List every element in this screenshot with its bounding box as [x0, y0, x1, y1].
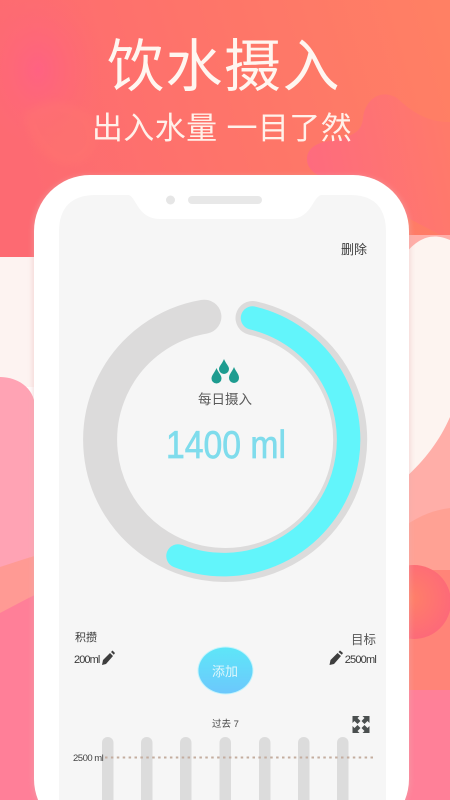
goal value	[330, 650, 376, 666]
goal label: 目标	[351, 633, 376, 647]
subtitle: 出入水量 一目了然	[92, 111, 352, 146]
phone frame	[32, 175, 411, 800]
add button	[198, 646, 254, 694]
goal value: 2500ml	[345, 654, 376, 666]
icon: pencil	[330, 650, 343, 665]
savings value	[74, 650, 115, 666]
target label: 2500 ml	[73, 753, 104, 764]
background: coral header	[0, 0, 450, 300]
icon: pencil	[102, 650, 115, 665]
chart heading: 过去 7	[212, 718, 239, 730]
title: 饮水摄入	[107, 35, 341, 99]
target line	[105, 756, 375, 758]
delete button: 删除	[341, 242, 367, 257]
phone speaker	[188, 196, 262, 204]
phone camera	[166, 196, 175, 204]
ring progress	[178, 318, 349, 565]
background: right waves	[377, 235, 450, 800]
bars	[102, 737, 348, 800]
water drops icon	[212, 359, 239, 384]
savings label: 积攒	[75, 630, 97, 644]
bar chart	[73, 737, 375, 800]
ring track	[100, 317, 350, 565]
background: left waves	[0, 257, 40, 800]
phone screen	[59, 195, 386, 800]
icon: expand	[352, 716, 370, 733]
background: header blob	[307, 94, 450, 240]
progress ring	[100, 317, 350, 565]
savings value: 200ml	[74, 654, 100, 666]
intake amount: 1400 ml	[166, 424, 286, 467]
add button: 添加	[212, 664, 238, 679]
daily intake label: 每日摄入	[198, 392, 252, 407]
